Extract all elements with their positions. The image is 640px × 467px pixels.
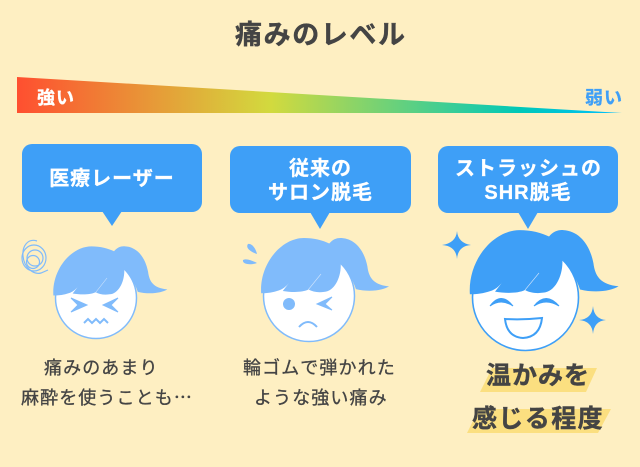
speech bubble: salon: [230, 146, 411, 229]
panel: medical laser: [21, 144, 202, 410]
icon: sparkle right: [579, 306, 606, 334]
speech bubble: medical laser: 医療レーザー: [49, 167, 175, 190]
speech bubble: SHR: SHR脱毛: [484, 181, 572, 204]
title: 痛みのレベル: [235, 20, 407, 50]
description: medical laser: 痛みのあまり: [44, 358, 159, 378]
description: salon: [243, 358, 396, 408]
icon: wincing face: [261, 238, 389, 342]
speech bubble: salon: サロン脱毛: [268, 181, 373, 204]
panel: salon hair removal: [230, 146, 411, 408]
description: medical laser: [21, 358, 193, 410]
speech bubble: SHR: ストラッシュの: [455, 158, 602, 180]
icon: face in severe pain: [53, 246, 167, 338]
icon: smiling face: [470, 230, 619, 350]
description: salon: 輪ゴムで弾かれた: [243, 358, 396, 378]
speech bubble: SHR: [438, 146, 618, 229]
icon: dizzy scribble: [22, 240, 48, 273]
icon: sparkle left: [442, 231, 471, 259]
description: medical laser: 麻酔を使うことも…: [21, 384, 193, 410]
speech bubble: medical laser: [22, 144, 202, 226]
highlighted conclusion text: [467, 362, 611, 433]
icon: sweat drops: [243, 244, 257, 264]
panel: Stlassh SHR: [438, 146, 619, 433]
highlighted conclusion text: 感じる程度: [472, 405, 604, 433]
description: salon: ような強い痛み: [254, 388, 388, 408]
pain gradient scale: [17, 77, 623, 113]
label: weak: 弱い: [585, 88, 623, 108]
highlighted conclusion text: 温かみを: [486, 362, 590, 390]
label: strong: 強い: [37, 88, 75, 108]
speech bubble: salon: 従来の: [289, 157, 352, 180]
